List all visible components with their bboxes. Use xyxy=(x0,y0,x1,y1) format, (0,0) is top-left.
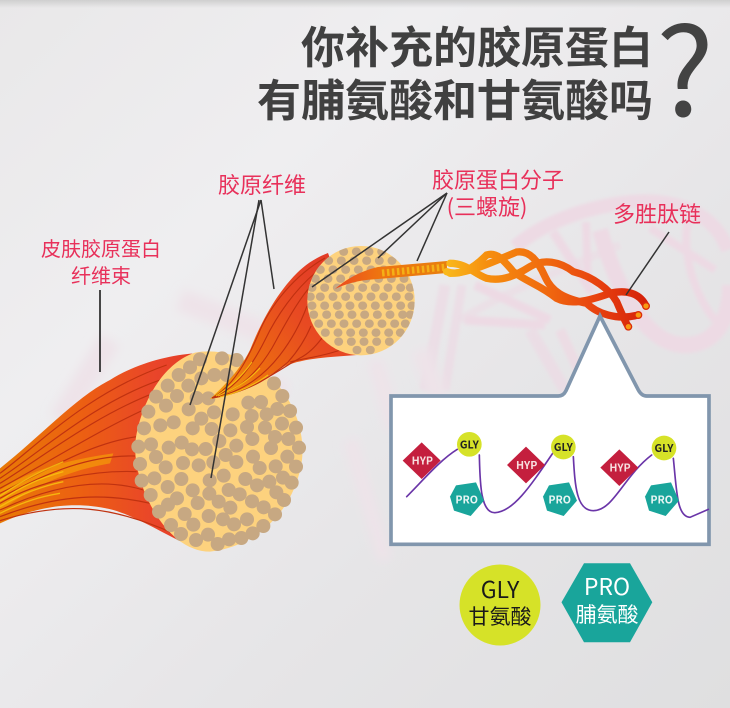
label: collagen molecule: (三螺旋) xyxy=(447,190,527,222)
PRO labels: PRO xyxy=(455,492,478,507)
label: polypeptide chain: 多胜肽链 xyxy=(613,197,701,229)
big fiber bundle xyxy=(0,353,207,551)
PRO labels: PRO xyxy=(650,492,673,507)
PRO labels xyxy=(455,492,673,507)
legend: PRO proline: 脯氨酸 xyxy=(576,599,638,629)
GLY labels xyxy=(460,437,674,456)
label: collagen fiber: 胶原纤维 xyxy=(218,168,306,200)
title: 你补充的胶原蛋白 xyxy=(301,12,653,76)
upper fiber bundle xyxy=(210,253,357,399)
HYP diamonds xyxy=(403,442,638,486)
callout panel xyxy=(391,316,709,544)
twisted rope xyxy=(335,261,447,289)
label: skin collagen fiber bundle: 皮肤胶原蛋白 xyxy=(41,233,161,262)
big fiber cross-section xyxy=(135,351,302,552)
label: skin collagen fiber bundle xyxy=(41,233,161,289)
GLY circles xyxy=(457,432,676,460)
strand ends xyxy=(625,303,649,330)
HYP labels xyxy=(412,454,631,476)
leader lines xyxy=(100,193,669,478)
legend: GLY glycine: GLY xyxy=(481,571,520,605)
HYP labels: HYP xyxy=(516,458,537,473)
small fiber cross-section xyxy=(307,246,415,355)
HYP labels: HYP xyxy=(609,461,631,476)
GLY labels: GLY xyxy=(554,440,574,455)
background: faint DNA structure xyxy=(60,201,730,560)
peptide chain xyxy=(407,449,708,517)
legend: GLY glycine xyxy=(460,564,540,646)
GLY labels: GLY xyxy=(460,437,480,452)
PRO hexagons xyxy=(450,482,679,516)
legend: PRO proline xyxy=(562,563,652,642)
HYP labels: HYP xyxy=(412,454,433,469)
label: skin collagen fiber bundle: 纤维束 xyxy=(71,260,131,289)
PRO labels: PRO xyxy=(548,492,571,507)
legend: GLY glycine: 甘氨酸 xyxy=(468,601,532,631)
title: 有脯氨酸和甘氨酸吗 xyxy=(257,65,653,129)
legend: PRO proline: PRO xyxy=(584,568,630,602)
label: collagen molecule xyxy=(432,163,564,222)
label: collagen molecule: 胶原蛋白分子 xyxy=(432,163,564,195)
title xyxy=(257,12,653,129)
GLY labels: GLY xyxy=(655,441,674,456)
triple helix strands xyxy=(447,252,649,330)
